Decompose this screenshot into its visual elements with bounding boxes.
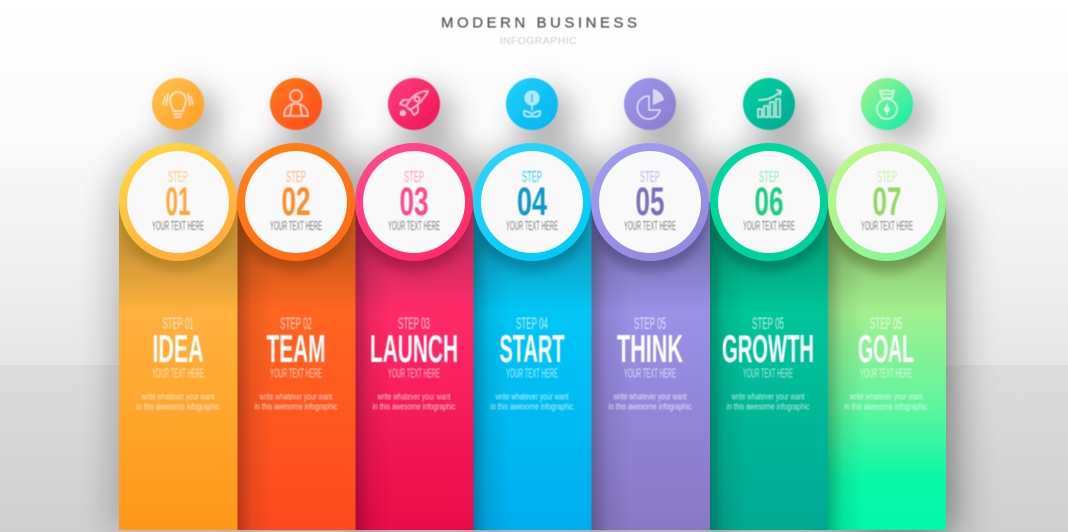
badge text: 04 bbox=[517, 180, 548, 224]
column text: write whatever your want bbox=[731, 392, 805, 402]
icon: person bbox=[270, 78, 322, 130]
badge text: STEP bbox=[877, 169, 897, 186]
outer ring bbox=[591, 143, 709, 261]
subheading: infographic: INFOGRAPHIC bbox=[500, 35, 577, 47]
column text: YOUR TEXT HERE bbox=[506, 366, 558, 380]
heading: modern business: MODERN BUSINESS bbox=[441, 14, 637, 32]
badge text: STEP bbox=[404, 169, 424, 186]
outer ring bbox=[237, 143, 355, 261]
column body bbox=[474, 202, 592, 530]
white badge bbox=[718, 151, 820, 253]
column text: write whatever your want bbox=[141, 392, 215, 402]
column text bbox=[844, 314, 928, 412]
badge text bbox=[743, 169, 795, 233]
column text: IDEA bbox=[152, 328, 204, 371]
panel: step 03 launch bbox=[354, 78, 474, 530]
white badge bbox=[836, 151, 938, 253]
ring shadow bbox=[238, 207, 356, 276]
column text bbox=[136, 314, 220, 412]
badge text: 05 bbox=[636, 180, 664, 224]
column text bbox=[254, 314, 338, 412]
left edge shade bbox=[238, 202, 274, 530]
column text: write whatever your want bbox=[377, 392, 451, 402]
outer ring bbox=[355, 143, 473, 261]
column text: STEP 05 bbox=[634, 314, 666, 333]
left edge shade bbox=[710, 202, 746, 530]
badge text: 07 bbox=[872, 180, 902, 224]
badge text bbox=[861, 169, 913, 233]
panel: step 05 think bbox=[590, 78, 710, 530]
panel: step 03 launch: YOUR TEXT HERE bbox=[388, 218, 440, 233]
column text bbox=[722, 314, 814, 412]
ring shadow bbox=[474, 206, 592, 276]
panel: step 06 growth bbox=[709, 78, 829, 530]
column text: GROWTH bbox=[722, 328, 814, 371]
column text: in this awesome infographic bbox=[136, 402, 220, 412]
column text: YOUR TEXT HERE bbox=[270, 366, 322, 380]
badge text bbox=[388, 169, 440, 233]
column body bbox=[592, 202, 710, 530]
icon: coin in hands bbox=[506, 78, 558, 130]
panel: step 04 start bbox=[472, 78, 592, 530]
column text: STEP 05 bbox=[752, 314, 784, 333]
column text: THINK bbox=[617, 328, 683, 371]
column text: write whatever your want bbox=[259, 392, 333, 402]
column text bbox=[370, 314, 458, 412]
badge text: STEP bbox=[168, 169, 188, 186]
panel: step 04 start: YOUR TEXT HERE bbox=[506, 218, 558, 233]
cast shadows behind columns and icons bbox=[110, 88, 950, 532]
shade under ring bbox=[356, 202, 474, 312]
outer ring bbox=[710, 143, 828, 261]
shade under ring bbox=[474, 202, 592, 312]
badge text: 06 bbox=[754, 180, 784, 224]
badge text: STEP bbox=[522, 169, 542, 186]
white badge bbox=[363, 151, 465, 253]
badge text bbox=[270, 169, 322, 233]
panel: step 01 idea: YOUR TEXT HERE bbox=[152, 218, 204, 233]
column text: YOUR TEXT HERE bbox=[743, 366, 793, 380]
column text bbox=[490, 314, 574, 412]
column text: STEP 01 bbox=[162, 314, 194, 333]
column text: STEP 02 bbox=[280, 314, 312, 333]
left edge shade bbox=[592, 202, 632, 530]
column body bbox=[710, 202, 828, 530]
column body bbox=[828, 202, 946, 530]
shade under ring bbox=[710, 202, 828, 312]
column text: write whatever your want bbox=[849, 392, 923, 402]
badge text bbox=[152, 169, 204, 233]
shade under ring bbox=[592, 202, 710, 312]
ring shadow bbox=[592, 202, 710, 276]
ring shadow bbox=[710, 206, 828, 276]
title block bbox=[441, 14, 637, 47]
column text: in this awesome infographic bbox=[254, 402, 338, 412]
ring shadow bbox=[356, 206, 474, 276]
shade under ring bbox=[119, 202, 238, 312]
badge text bbox=[506, 169, 558, 233]
panel: step 01 idea bbox=[118, 78, 238, 530]
column text: in this awesome infographic bbox=[844, 402, 928, 412]
panel: step 07 goal: YOUR TEXT HERE bbox=[861, 218, 913, 233]
column text: STEP 05 bbox=[870, 314, 902, 333]
column body bbox=[356, 202, 474, 530]
column text: in this awesome infographic bbox=[726, 402, 810, 412]
icon: rocket bbox=[388, 78, 440, 130]
column body bbox=[238, 202, 356, 530]
badge text: STEP bbox=[640, 169, 660, 186]
white badge bbox=[245, 151, 347, 253]
column text: YOUR TEXT HERE bbox=[388, 366, 440, 380]
column text: YOUR TEXT HERE bbox=[624, 366, 676, 380]
white badge bbox=[127, 151, 229, 253]
icon: light bulb bbox=[152, 78, 204, 130]
column body bbox=[119, 202, 238, 530]
column text: TEAM bbox=[266, 328, 326, 371]
ring shadow bbox=[119, 208, 238, 275]
column text: STEP 03 bbox=[398, 314, 430, 333]
badge text: 03 bbox=[400, 180, 428, 224]
shade under ring bbox=[828, 202, 946, 312]
outer ring bbox=[473, 143, 591, 261]
icon: growth bars bbox=[743, 78, 795, 130]
left edge shade bbox=[474, 202, 510, 530]
panel: step 05 think: YOUR TEXT HERE bbox=[624, 218, 676, 233]
panel: step 02 team: YOUR TEXT HERE bbox=[270, 218, 322, 233]
badge text: STEP bbox=[759, 169, 779, 186]
column text: YOUR TEXT HERE bbox=[152, 366, 204, 380]
column text: STEP 04 bbox=[516, 314, 548, 333]
column text: GOAL bbox=[858, 328, 914, 371]
panel: step 02 team bbox=[236, 78, 356, 530]
icon: pie chart bbox=[624, 78, 676, 130]
ring shadow bbox=[828, 206, 946, 276]
column text bbox=[608, 314, 692, 412]
column text: in this awesome infographic bbox=[608, 402, 692, 412]
column text: in this awesome infographic bbox=[490, 402, 574, 412]
outer ring bbox=[119, 143, 237, 261]
column text: LAUNCH bbox=[370, 328, 458, 371]
left edge shade bbox=[828, 202, 864, 530]
panel: step 06 growth: YOUR TEXT HERE bbox=[743, 218, 795, 233]
white badge bbox=[481, 151, 583, 253]
column text: START bbox=[500, 328, 565, 371]
panel: step 07 goal bbox=[827, 78, 947, 530]
column text: in this awesome infographic bbox=[372, 402, 456, 412]
column text: write whatever your want bbox=[613, 392, 687, 402]
badge text bbox=[624, 169, 676, 233]
outer ring bbox=[828, 143, 946, 261]
shade under ring bbox=[238, 202, 356, 312]
column text: YOUR TEXT HERE bbox=[860, 366, 912, 380]
badge text: STEP bbox=[286, 169, 306, 186]
icon: money bag bbox=[861, 78, 913, 130]
badge text: 02 bbox=[282, 180, 310, 224]
column text: write whatever your want bbox=[495, 392, 569, 402]
white badge bbox=[599, 151, 701, 253]
left edge shade bbox=[356, 202, 392, 530]
badge text: 01 bbox=[166, 180, 190, 224]
